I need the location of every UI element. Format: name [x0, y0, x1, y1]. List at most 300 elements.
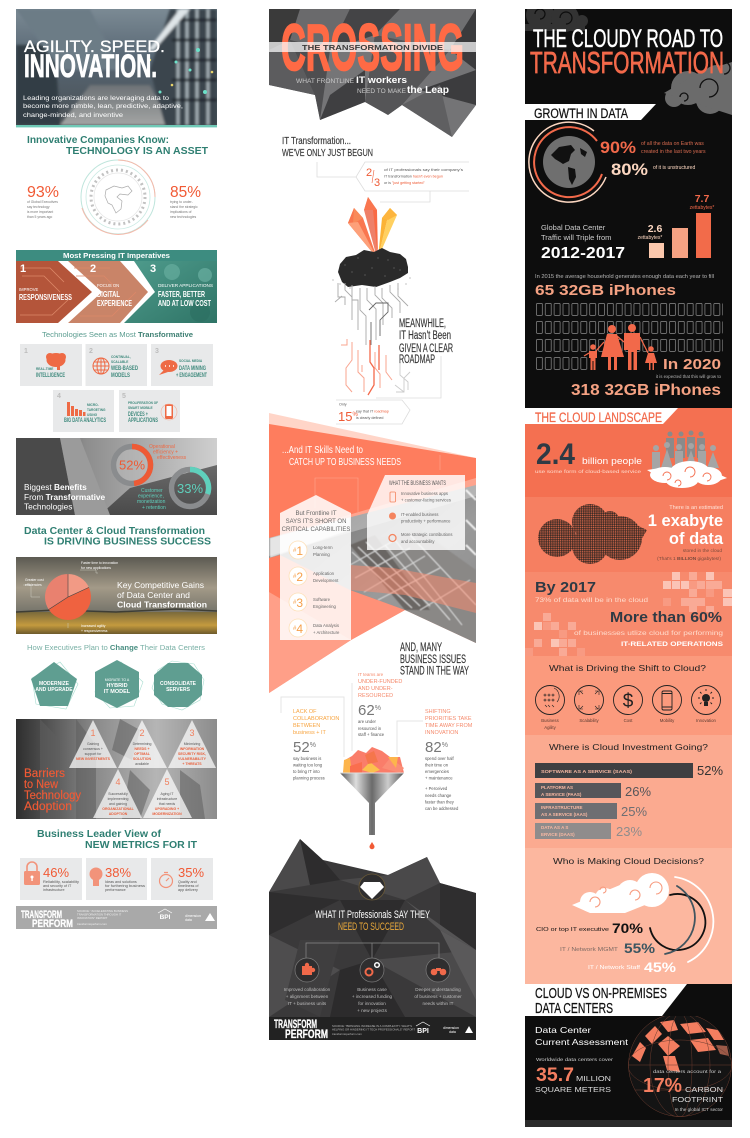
panel: key competitive gains: of Data Center and — [117, 591, 190, 600]
panel: lack of collaboration: say business is — [293, 756, 321, 761]
panel: what the business wants: IT-enabled business — [401, 512, 438, 517]
chart: zettabytes bars — [638, 193, 714, 258]
panel: frontline IT capabilities: Data Analysis — [313, 623, 339, 628]
chart: investment bars: 23% — [616, 824, 642, 839]
shape: modernize and upgrade: AND UPGRADE — [35, 687, 73, 693]
panel: biggest benefits: experience, — [138, 494, 164, 500]
icon: top-left cloud — [525, 9, 588, 32]
stat: 80 percent — [611, 160, 695, 179]
chart: pie — [45, 574, 91, 620]
shape: consolidate servers: CONSOLIDATE — [160, 681, 197, 687]
panel: biggest benefits: 33% — [177, 481, 203, 496]
icon: innovation — [698, 689, 714, 706]
panel: under-funded: % — [375, 705, 381, 712]
stat: 90 percent: created in the last two years — [641, 149, 706, 155]
panel: black background growth in data: In 2015 the average household generates enough data each year to fill — [535, 274, 714, 280]
footer: column 2 logos and source — [274, 1017, 473, 1041]
panel: most pressing IT imperatives: 3 — [150, 263, 156, 275]
panel: frontline IT capabilities: # — [293, 574, 297, 580]
panel: biggest benefits: Operational — [149, 444, 175, 450]
stat: 1 exabyte of data: (That's 1 BILLION gigabytes!) — [657, 556, 721, 562]
stat: 93 percent: of Global Executives — [27, 200, 58, 204]
panel: who is making cloud decisions: IT / Network MGMT — [560, 947, 619, 953]
panel: barriers to new technology adoption: SECURITY RISK, — [178, 752, 206, 756]
panel: metrics: 46% — [43, 865, 69, 880]
callout: two thirds: of IT professionals say their company's — [384, 168, 463, 172]
stat: 93 percent — [27, 184, 59, 219]
hero banner: Leading organizations are leveraging data to — [23, 95, 169, 102]
panel: driving the shift to cloud: Scalability — [579, 718, 600, 723]
panel: five transformative technologies: DATA MINING — [179, 366, 206, 372]
panel: five transformative technologies: MODELS — [111, 373, 130, 379]
panel: key competitive gains: + responsiveness — [81, 629, 108, 633]
stat: 35.7 million square meters: SQUARE METERS — [535, 1085, 611, 1094]
panel: five transformative technologies: INTELLIGENCE — [36, 373, 65, 379]
text: current assessment: Current Assessment — [535, 1037, 629, 1047]
stat: 90 percent: of all the data on Earth was — [641, 141, 704, 147]
panel: biggest benefits: Customer — [141, 488, 163, 494]
callout: only 15 percent: Only — [339, 402, 347, 406]
heading: data center and cloud transformation — [24, 525, 211, 548]
panel: driving the shift to cloud: What is Driving the Shift to Cloud? — [549, 663, 706, 673]
heading: just begun — [282, 135, 373, 159]
stat: 93 percent: say technology — [27, 205, 50, 209]
panel: biggest benefits: Technologies — [24, 502, 72, 512]
panel: who is making cloud decisions: 45% — [644, 959, 677, 975]
panel: under-funded: staff + finance — [358, 732, 385, 737]
shape: consolidate servers: SERVERS — [166, 687, 191, 693]
text: many business issues — [400, 642, 469, 678]
heading: new metrics for IT: Business Leader View of — [37, 829, 162, 840]
text: meanwhile: IT Hasn't Been — [399, 330, 451, 342]
panel: five transformative technologies: 4 — [57, 393, 61, 400]
panel: biggest benefits: 52% — [119, 458, 145, 472]
stat: more than 60 percent: IT-RELATED OPERATIONS — [621, 641, 724, 648]
panel: what the business wants: + customer-facing services — [401, 498, 451, 502]
stat: 85 percent: trying to under- — [170, 200, 193, 204]
panel: what the business wants: WHAT THE BUSINESS WANTS — [389, 481, 446, 487]
panel: barriers to new technology adoption: Successfully — [108, 792, 128, 796]
band: cloud vs on-premises: DATA CENTERS — [535, 1000, 613, 1017]
stat: 17 percent carbon footprint: data centers account for a — [653, 1069, 721, 1075]
panel: shifting priorities: can be addressed — [425, 806, 459, 811]
text: meanwhile: GIVEN A CLEAR — [399, 343, 453, 355]
panel: barriers to new technology adoption: + THREATS — [182, 762, 202, 766]
panel: IT skills catch up: ...And IT Skills Need to — [282, 444, 363, 456]
panel: what IT professionals need to succeed: + alignment between — [286, 994, 329, 999]
panel: lack of collaboration: BETWEEN — [293, 723, 320, 729]
shape: migrate to hybrid IT: MIGRATE TO A — [105, 678, 130, 682]
footer: column 2 logos and source: TRANSFORM — [274, 1017, 317, 1031]
chart: decision arcs — [650, 877, 713, 962]
chart: investment bars: 26% — [625, 784, 651, 799]
icon: crowd over white cloud — [647, 430, 727, 488]
header: polygon banner — [269, 9, 476, 139]
shape: modernize and upgrade: MODERNIZE — [39, 681, 70, 687]
panel: who is making cloud decisions — [525, 848, 732, 984]
band: growth in data: GROWTH IN DATA — [534, 106, 628, 121]
panel: most pressing IT imperatives: FASTER, BETTER — [158, 289, 205, 299]
panel: shifting priorities: INNOVATION — [425, 730, 458, 736]
illustration: checker globe — [628, 1013, 732, 1117]
icon: binoculars — [426, 958, 450, 982]
panel: metrics: 35% — [178, 865, 204, 880]
panel: most pressing IT imperatives — [16, 250, 217, 323]
chart: zettabytes bars: 2.6 — [648, 223, 662, 235]
stat: 35.7 million square meters: Worldwide data centers cover — [536, 1057, 613, 1063]
icon: cost: $ — [623, 691, 634, 712]
heading: technology is an asset: TECHNOLOGY IS AN ASSET — [66, 146, 208, 157]
stat: 35.7 million square meters: 35.7 — [536, 1065, 574, 1086]
footer: column 1 logos and source: transformtoperform.com — [77, 922, 108, 926]
chart: zettabytes bars: 7.7 — [695, 193, 709, 205]
stat: 85 percent: new technologies — [170, 215, 197, 219]
panel: five transformative technologies: REAL-TIME — [36, 367, 53, 371]
hero banner: become more nimble, lean, predictive, adaptive, — [23, 103, 183, 110]
panel: biggest benefits: From Transformative — [24, 492, 106, 502]
footer: column 1 logos and source: data — [185, 918, 192, 922]
icon: lock — [24, 862, 40, 885]
shape: migrate to hybrid IT: HYBRID — [106, 683, 128, 689]
hero banner: INNOVATION. — [24, 48, 157, 84]
chart: investment bars: A SERVICE (PAAS) — [541, 792, 582, 797]
panel: frontline IT capabilities: + Architecture — [313, 630, 340, 635]
callout: only 15 percent: % — [352, 412, 358, 418]
panel: key competitive gains: Cloud Transformation — [117, 600, 207, 610]
panel: five transformative technologies: 1 — [24, 348, 28, 355]
icon: scalability — [579, 691, 599, 709]
panel: what IT professionals need to succeed — [269, 835, 476, 1041]
shape: migrate to hybrid IT — [95, 660, 143, 708]
text: data center traffic: Global Data Center — [541, 223, 606, 232]
chart: investment bars: 52% — [697, 763, 723, 778]
panel: under-funded — [352, 672, 402, 751]
heading: technologies seen as most transformative: Technologies Seen as Most Transformative — [42, 332, 193, 339]
icon: dotted data cloud — [538, 504, 647, 564]
callout: two thirds: or is "just getting started" — [384, 181, 425, 185]
stat: more than 60 percent: More than 60% — [610, 610, 722, 626]
stat: 17 percent carbon footprint: In the global ICT sector — [675, 1107, 723, 1112]
callout: two thirds: IT transformation hasn't even begun — [384, 174, 443, 178]
panel: five transformative technologies: 5 — [122, 393, 126, 400]
footer: column 1 logos and source: TRANSFORM — [21, 909, 62, 921]
shape: migrate to hybrid IT: IT MODEL — [104, 689, 131, 695]
hero banner: change-minded, and inventive — [23, 112, 123, 119]
panel: barriers to new technology adoption: OPTIMAL — [134, 752, 151, 756]
panel: driving the shift to cloud: Business — [541, 718, 559, 723]
icon: web globe — [93, 358, 109, 374]
panel: who is making cloud decisions: CIO or top IT executive — [536, 927, 609, 933]
decoration: pixel squares — [525, 572, 732, 656]
header: polygon banner: the Leap — [407, 85, 449, 96]
chart: investment bars: DATA AS A S — [541, 825, 568, 830]
panel: frontline IT capabilities: 1 — [296, 544, 303, 558]
shape: consolidate servers — [152, 661, 204, 710]
panel: under-funded: resourced in — [358, 726, 382, 731]
panel: lack of collaboration: 52 — [293, 739, 310, 756]
panel: lack of collaboration: to bring IT into — [293, 769, 320, 774]
stat: 1 exabyte of data: stored in the cloud — [683, 548, 722, 554]
panel: five transformative technologies: 3 — [155, 348, 159, 355]
panel: five transformative technologies: 2 — [89, 348, 93, 355]
panel: metrics: Reliability, scalability — [43, 880, 79, 884]
panel: driving the shift to cloud: Agility — [544, 725, 557, 730]
heading: data center and cloud transformation: Data Center & Cloud Transformation — [24, 525, 205, 537]
panel: five transformative technologies: WEB-BASED — [111, 366, 138, 372]
callout: only 15 percent: say that IT roadmap — [356, 410, 389, 414]
panel: metrics: for furthering business — [105, 884, 145, 888]
panel: who is making cloud decisions: 55% — [624, 940, 656, 956]
chart: investment bars: SOFTWARE AS A SERVICE (SAAS) — [541, 769, 633, 774]
stat: 1 exabyte of data: 1 exabyte — [648, 512, 723, 530]
panel: what the business wants: Innovative business apps — [401, 491, 448, 496]
panel: five transformative technologies: CONTINUAL, — [111, 355, 131, 359]
footer: column 1 logos and source — [16, 906, 217, 930]
icon: gears — [360, 958, 384, 982]
panel: under-funded: RESOURCED — [358, 693, 393, 699]
panel: shifting priorities: faster than they — [425, 800, 455, 804]
panel: five transformative technologies: SMART MOBILE — [128, 406, 153, 410]
chart: investment bars: 25% — [621, 804, 647, 819]
stat: 85 percent: stand the strategic — [170, 205, 198, 209]
panel: under-funded: UNDER-FUNDED — [358, 679, 402, 685]
header: polygon banner: NEED TO MAKE — [357, 88, 406, 95]
chart: iPhone grid — [536, 303, 723, 371]
panel: lack of collaboration: waiting too long — [293, 762, 323, 768]
heading: technology is an asset: Innovative Companies Know: — [27, 135, 169, 146]
panel: lack of collaboration — [281, 697, 344, 780]
text: data center traffic: 2012-2017 — [541, 245, 625, 262]
stat: 2.4 billion people: billion people — [582, 456, 642, 467]
icon: bar chart — [67, 402, 86, 416]
panel: frontline IT capabilities: # — [293, 548, 297, 554]
panel: frontline IT capabilities: # — [293, 626, 297, 632]
panel: frontline IT capabilities: Software — [313, 597, 331, 602]
panel: driving the shift to cloud: Cost — [624, 718, 633, 723]
callout: only 15 percent: 15 — [338, 409, 352, 424]
panel: what the business wants: More strategic contributions — [401, 532, 452, 537]
chart: investment bars: INFRASTRUCTURE — [541, 805, 582, 810]
band: the cloud landscape: THE CLOUD LANDSCAPE — [535, 410, 662, 425]
stat: 85 percent — [170, 184, 201, 219]
callout: two thirds: 3 — [374, 177, 380, 189]
chart: zettabytes bars: zettabytes* — [638, 235, 662, 241]
panel: barriers to new technology adoption: and gaining — [109, 802, 127, 806]
panel: barriers to new technology adoption: VULNERABILITY — [178, 757, 207, 761]
panel: shifting priorities — [397, 709, 473, 811]
panel: barriers to new technology adoption: Barriers — [24, 768, 65, 780]
panel: barriers to new technology adoption — [16, 719, 217, 819]
panel: key competitive gains: Greater cost — [25, 578, 44, 582]
panel: lack of collaboration: COLLABORATION — [293, 716, 339, 722]
panel: most pressing IT imperatives: AND AT LOW COST — [158, 298, 212, 308]
callout: two thirds — [317, 162, 469, 202]
panel: what IT professionals need to succeed: + new projects — [357, 1008, 388, 1013]
panel: shifting priorities: emergencies — [425, 769, 449, 774]
panel: IT skills catch up — [269, 413, 476, 693]
footer: column 2 logos and source: dimension — [443, 1026, 459, 1030]
panel: frontline IT capabilities: Engineering — [313, 604, 337, 609]
footer: column 1 logos and source: SOURCE: "ACCELERATING BUSINESS — [77, 909, 128, 913]
panel: key competitive gains — [16, 557, 217, 634]
panel: barriers to new technology adoption: 1 — [90, 728, 96, 738]
icon: mobility — [662, 691, 672, 710]
stat: 93 percent: is more important — [27, 210, 53, 214]
callout: only 15 percent — [336, 356, 441, 424]
stat: 80 percent: of it is unstructured — [653, 165, 695, 171]
panel: barriers to new technology adoption: 5 — [164, 777, 170, 787]
text: current assessment: Data Center — [535, 1025, 591, 1035]
panel: frontline IT capabilities: Long-term — [313, 545, 333, 550]
footer: column 2 logos and source: BPI — [417, 1028, 429, 1035]
panel: biggest benefits: monetization — [137, 499, 166, 505]
footer: column 1 logos and source: PERFORM — [32, 918, 73, 930]
illustration: soil mound — [332, 248, 411, 290]
stat: 17 percent carbon footprint: 17% — [643, 1075, 682, 1097]
panel: most pressing IT imperatives: IMPROVE — [19, 287, 39, 292]
panel: what IT professionals need to succeed: for innovation — [358, 1001, 386, 1006]
panel: barriers to new technology adoption: infrastructure — [157, 797, 177, 801]
panel: five transformative technologies: DEVICES + — [128, 412, 148, 418]
panel: key competitive gains: Key Competitive Gains — [117, 581, 204, 590]
panel: shifting priorities: their time on — [425, 762, 449, 768]
panel: barriers to new technology adoption: 2 — [139, 728, 145, 738]
text: many business issues: BUSINESS ISSUES — [400, 654, 466, 666]
panel: barriers to new technology adoption: NEW INVESTMENTS — [76, 757, 111, 761]
stat: 80 percent: 80% — [611, 160, 648, 179]
illustration: crystals — [348, 197, 397, 258]
chart: investment bars: AS A SERVICE (IAAS) — [541, 812, 588, 817]
illustration: funnel — [340, 747, 404, 849]
band: cloud vs on-premises — [525, 984, 687, 1017]
text: data center traffic: Traffic will Triple from — [541, 233, 611, 242]
stat: by 2017: By 2017 — [535, 579, 596, 596]
panel: what IT professionals need to succeed: needs within IT — [423, 1001, 454, 1006]
panel: column 3 the cloudy road to transformation — [525, 1, 732, 1127]
panel: cloud vs on-premises data centers — [525, 984, 732, 1127]
panel: key competitive gains: for new applications — [81, 566, 111, 570]
panel: what IT professionals need to succeed: + increased funding — [352, 994, 393, 999]
footer: column 1 logos and source: dimension — [185, 914, 201, 918]
header: polygon banner: WHAT FRONTLINE — [296, 78, 354, 85]
chart: globe illustration — [81, 160, 155, 234]
icon: speech bubble — [159, 360, 178, 375]
heading: how executives plan to change: How Executives Plan to Change Their Data Centers — [27, 645, 206, 652]
icon: puzzle — [295, 958, 319, 982]
footer: column 2 logos and source: transformtoperform.com — [332, 1032, 363, 1036]
panel: five transformative technologies: SCALABLE — [111, 360, 128, 364]
panel: under-funded: IT teams are — [358, 672, 384, 677]
panel: the cloud landscape — [525, 408, 732, 656]
icon: light bulb — [90, 868, 102, 886]
panel: metrics: Quality and — [178, 880, 197, 884]
panel: barriers to new technology adoption: that needs — [159, 802, 175, 806]
panel: five transformative technologies: PROLIFERATION OF — [128, 401, 158, 405]
band: cloud vs on-premises: CLOUD VS ON-PREMISES — [535, 985, 667, 1002]
stat: 17 percent carbon footprint — [643, 1069, 723, 1112]
footer: column 1 logos and source: TRANSFORMATION THROUGH IT — [77, 912, 121, 916]
panel: barriers to new technology adoption: Technology — [24, 790, 81, 802]
stat: 90 percent: 90% — [600, 138, 636, 157]
icon: brain — [46, 353, 66, 370]
stat: 1 exabyte of data: There is an estimated — [669, 505, 723, 511]
stat: 17 percent carbon footprint: FOOTPRINT — [672, 1095, 723, 1104]
panel: frontline IT capabilities: CRITICAL CAPABILITIES — [282, 527, 350, 533]
panel: lack of collaboration: planning process — [293, 776, 325, 780]
icon: stopwatch — [160, 872, 172, 888]
icon: large gray cloud — [664, 62, 732, 115]
stat: 85 percent: implications of — [170, 210, 192, 214]
panel: frontline IT capabilities: But Frontline IT — [295, 511, 337, 517]
footer: column 2 logos and source: SOURCE: "BRINGING INCREASE IN A COMPLEXITY: WHAT'S — [332, 1024, 412, 1028]
panel: most pressing IT imperatives: DIGITAL — [97, 289, 120, 299]
panel: metrics: performance — [105, 888, 126, 892]
stat: 35.7 million square meters — [535, 1057, 613, 1094]
panel: driving the shift to cloud — [525, 656, 732, 735]
stat: 2.4 billion people: 2.4 — [536, 438, 575, 471]
panel: barriers to new technology adoption: implementing — [108, 797, 128, 801]
heading: just begun: WE'VE ONLY JUST BEGUN — [282, 147, 373, 159]
panel: where is cloud investment going — [525, 735, 732, 848]
panel: barriers to new technology adoption: Minimizing — [184, 742, 200, 746]
panel: metrics: Ideas and solutions — [105, 880, 137, 884]
panel: five transformative technologies: + ENGAGEMENT — [176, 373, 207, 379]
panel: barriers to new technology adoption: NEEDS + — [134, 747, 150, 751]
shape: modernize and upgrade — [31, 662, 78, 709]
panel: what the business wants — [367, 475, 465, 550]
icon: diamond — [359, 874, 385, 900]
panel: what the business wants: and accountability — [401, 539, 435, 544]
panel: what IT professionals need to succeed: Business case — [357, 987, 387, 992]
panel: what IT professionals need to succeed: IT + business units — [288, 1001, 327, 1006]
header: polygon banner: CROSSING — [281, 10, 464, 84]
chart: investment bars — [535, 763, 723, 839]
icon: earth with rings — [529, 122, 606, 202]
panel: frontline IT capabilities: 4 — [296, 622, 303, 636]
panel: barriers to new technology adoption: to New — [24, 779, 59, 791]
panel: barriers to new technology adoption: UPGRADING + — [155, 807, 179, 811]
panel: five transformative technologies: SOCIAL MEDIA — [179, 359, 203, 363]
header: polygon banner: THE TRANSFORMATION DIVIDE — [302, 43, 443, 52]
panel: most pressing IT imperatives: DELIVER APPLICATIONS — [158, 283, 213, 288]
panel: IT skills catch up: CATCH UP TO BUSINESS NEEDS — [289, 456, 401, 468]
panel: frontline IT capabilities: Planning — [313, 552, 330, 557]
panel: shifting priorities: SHIFTING — [425, 709, 451, 715]
panel: what IT professionals need to succeed: of business + customer — [414, 994, 462, 999]
panel: three data center plans — [31, 660, 204, 710]
panel: most pressing IT imperatives: EXPERIENCE — [97, 298, 132, 308]
panel: column 1 agility speed innovation — [16, 9, 217, 930]
footer: column 2 logos and source: data — [449, 1030, 456, 1034]
panel: black background growth in data: 65 32GB iPhones — [535, 282, 676, 299]
stat: 17 percent carbon footprint: CARBON — [685, 1085, 723, 1094]
panel: biggest benefits: effectiveness — [157, 455, 187, 461]
stat: 35.7 million square meters: MILLION — [576, 1074, 611, 1083]
panel: where is cloud investment going: Where is Cloud Investment Going? — [549, 742, 708, 752]
panel: barriers to new technology adoption: ORGANIZATIONAL — [102, 807, 135, 811]
stat: 93 percent: than 5 years ago — [27, 215, 52, 219]
panel: shifting priorities: needs change — [425, 793, 452, 798]
footer: column 1 logos and source: BPI — [160, 914, 171, 921]
panel: lack of collaboration: business + IT — [293, 730, 327, 736]
panel: most pressing IT imperatives: FOCUS ON — [97, 283, 119, 288]
panel: what IT professionals need to succeed: Deeper understanding — [415, 987, 461, 992]
panel: five transformative technologies: MICRO- — [87, 403, 99, 407]
text: many business issues: STAND IN THE WAY — [400, 666, 469, 678]
panel: frontline IT capabilities — [280, 495, 351, 640]
panel: five transformative technologies: BIG DATA ANALYTICS — [64, 418, 106, 424]
chart: investment bars: PLATFORM AS — [541, 785, 573, 790]
